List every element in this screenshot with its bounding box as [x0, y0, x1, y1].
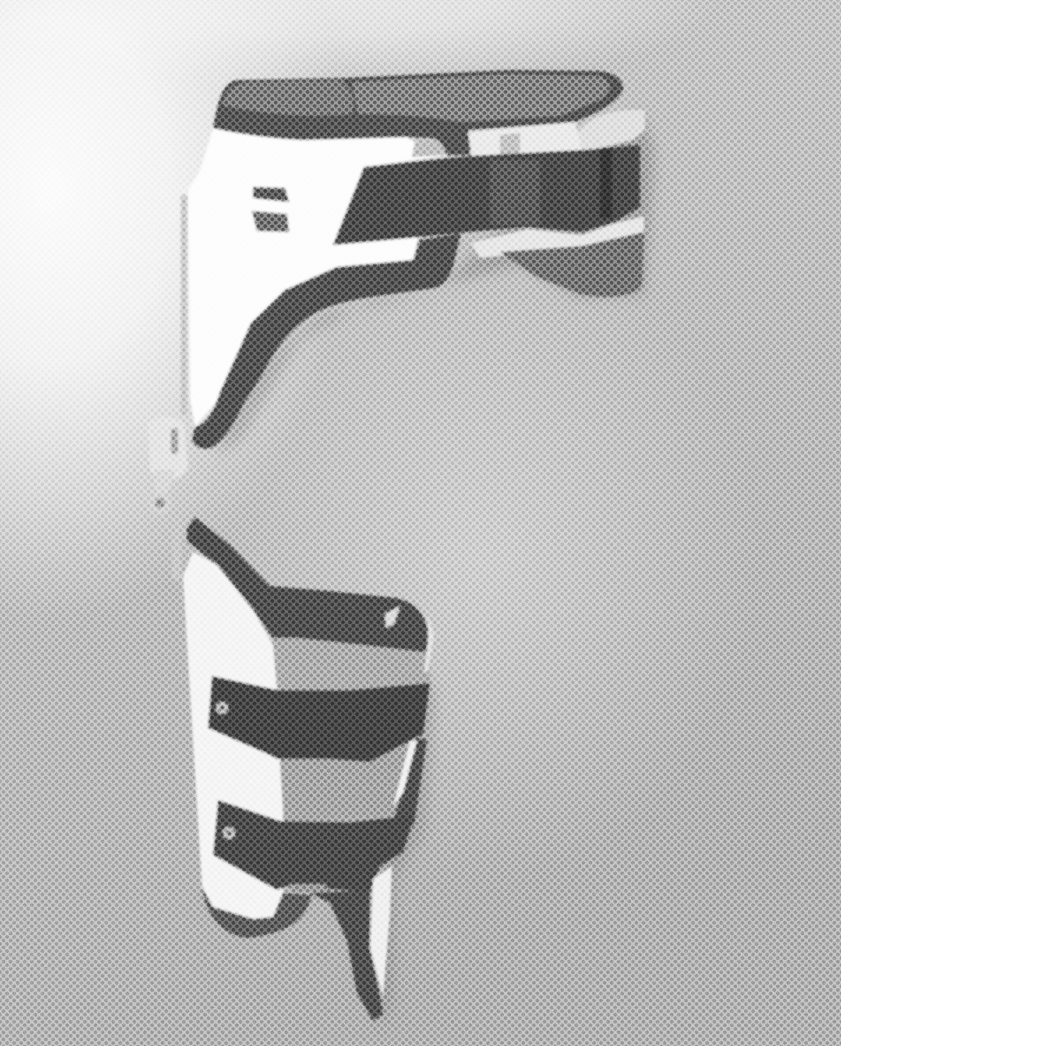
back pad	[500, 232, 644, 297]
dark lower padding	[192, 233, 461, 449]
rim highlight	[424, 615, 434, 672]
ratchet knob	[578, 110, 645, 152]
white shell	[183, 552, 283, 919]
halftone photograph of a hinged knee brace	[0, 0, 841, 1046]
halftone screen overlay	[0, 0, 841, 1046]
lower ratchet strip	[471, 216, 644, 258]
tail dark	[310, 890, 383, 1021]
vent slots	[253, 187, 289, 202]
white shell	[188, 128, 447, 427]
grey strap gap	[280, 742, 410, 820]
ratchet white top	[468, 122, 583, 160]
hinge bar	[148, 195, 188, 580]
dark top padding	[213, 70, 623, 155]
shell inner grey patch	[415, 236, 432, 252]
upper strap	[208, 676, 430, 762]
dark strap	[333, 145, 640, 245]
sliver dark backing	[392, 738, 427, 825]
grey liner band	[272, 636, 431, 824]
hinge screw	[155, 498, 170, 512]
lighter pad panels	[222, 80, 354, 116]
cast shadows	[215, 110, 655, 1030]
tail white	[370, 866, 392, 997]
upper cuff	[188, 70, 645, 449]
lower strap	[213, 800, 415, 892]
paper grain overlay	[0, 0, 841, 1046]
photo background	[0, 0, 841, 1046]
dark upper pad	[187, 517, 430, 652]
lower cuff	[183, 517, 434, 1021]
white sliver	[393, 741, 417, 807]
bottom pad	[202, 888, 312, 938]
